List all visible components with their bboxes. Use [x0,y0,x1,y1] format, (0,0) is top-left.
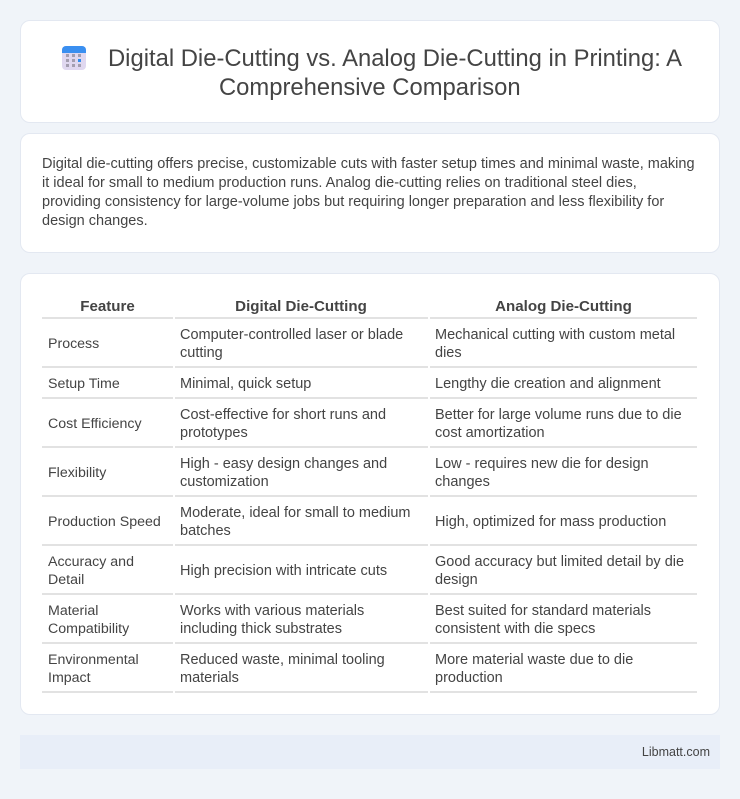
intro panel [20,133,720,253]
comparison table: production [435,670,503,686]
comparison table: cost amortization [435,425,545,441]
row: material compatibility: Compatibility [48,621,129,637]
comparison table: including thick substrates [180,621,342,637]
footer bar [20,735,720,769]
comparison table: Moderate, ideal for small to medium [180,505,410,521]
row: environmental impact: Impact [48,670,91,686]
row: flexibility: Flexibility [48,465,106,481]
intro text: providing consistency for large-volume jobs but requiring longer preparation and less flexibility for [42,194,664,210]
row: environmental impact: Environmental [48,652,139,668]
title [108,45,682,101]
table header [80,298,632,315]
comparison table: Reduced waste, minimal tooling [180,652,385,668]
intro text: Digital die-cutting offers precise, customizable cuts with faster setup times and minimal waste, making [42,156,695,172]
row: accuracy and detail: Accuracy and [48,554,134,570]
row: accuracy and detail [48,554,134,588]
comparison table: consistent with die specs [435,621,595,637]
comparison table: materials [180,670,239,686]
comparison table: changes [435,474,490,490]
comparison table: Mechanical cutting with custom metal [435,327,675,343]
comparison table: Works with various materials [180,603,364,619]
comparison table: Cost-effective for short runs and [180,407,386,423]
row: material compatibility [48,603,130,637]
footer credit: Libmatt.com [642,745,710,759]
intro text [42,156,695,229]
comparison table: Computer-controlled laser or blade [180,327,403,343]
row: setup time: Setup Time [48,376,120,392]
comparison table: High - easy design changes and [180,456,387,472]
comparison table: batches [180,523,231,539]
row: process: Process [48,336,99,352]
icon: calendar [62,46,86,70]
comparison table: design [435,572,478,588]
comparison table: customization [180,474,269,490]
comparison table: High precision with intricate cuts [180,563,387,579]
comparison table: Low - requires new die for design [435,456,649,472]
table header: Analog Die-Cutting [495,298,632,315]
comparison table: Good accuracy but limited detail by die [435,554,684,570]
intro text: it ideal for small to medium production runs. Analog die-cutting relies on traditional steel dies, [42,175,637,191]
row: cost efficiency: Cost Efficiency [48,416,142,432]
comparison table: Better for large volume runs due to die [435,407,682,423]
table header: Digital Die-Cutting [235,298,367,315]
comparison table: prototypes [180,425,248,441]
comparison table: Best suited for standard materials [435,603,651,619]
header panel [20,20,720,123]
panel: comparison table [20,273,720,715]
title: Digital Die-Cutting vs. Analog Die-Cutting in Printing: A [108,45,682,72]
table header: Feature [80,298,135,315]
row: environmental impact [48,652,139,686]
comparison table: High, optimized for mass production [435,514,666,530]
row: material compatibility: Material [48,603,98,619]
comparison table: cutting [180,345,223,361]
comparison table: dies [435,345,462,361]
title: Comprehensive Comparison [219,74,521,101]
comparison table: Lengthy die creation and alignment [435,376,661,392]
comparison table: More material waste due to die [435,652,633,668]
comparison table: Minimal, quick setup [180,376,311,392]
row: accuracy and detail: Detail [48,572,84,588]
row: production speed: Production Speed [48,514,161,530]
intro text: design changes. [42,213,148,229]
